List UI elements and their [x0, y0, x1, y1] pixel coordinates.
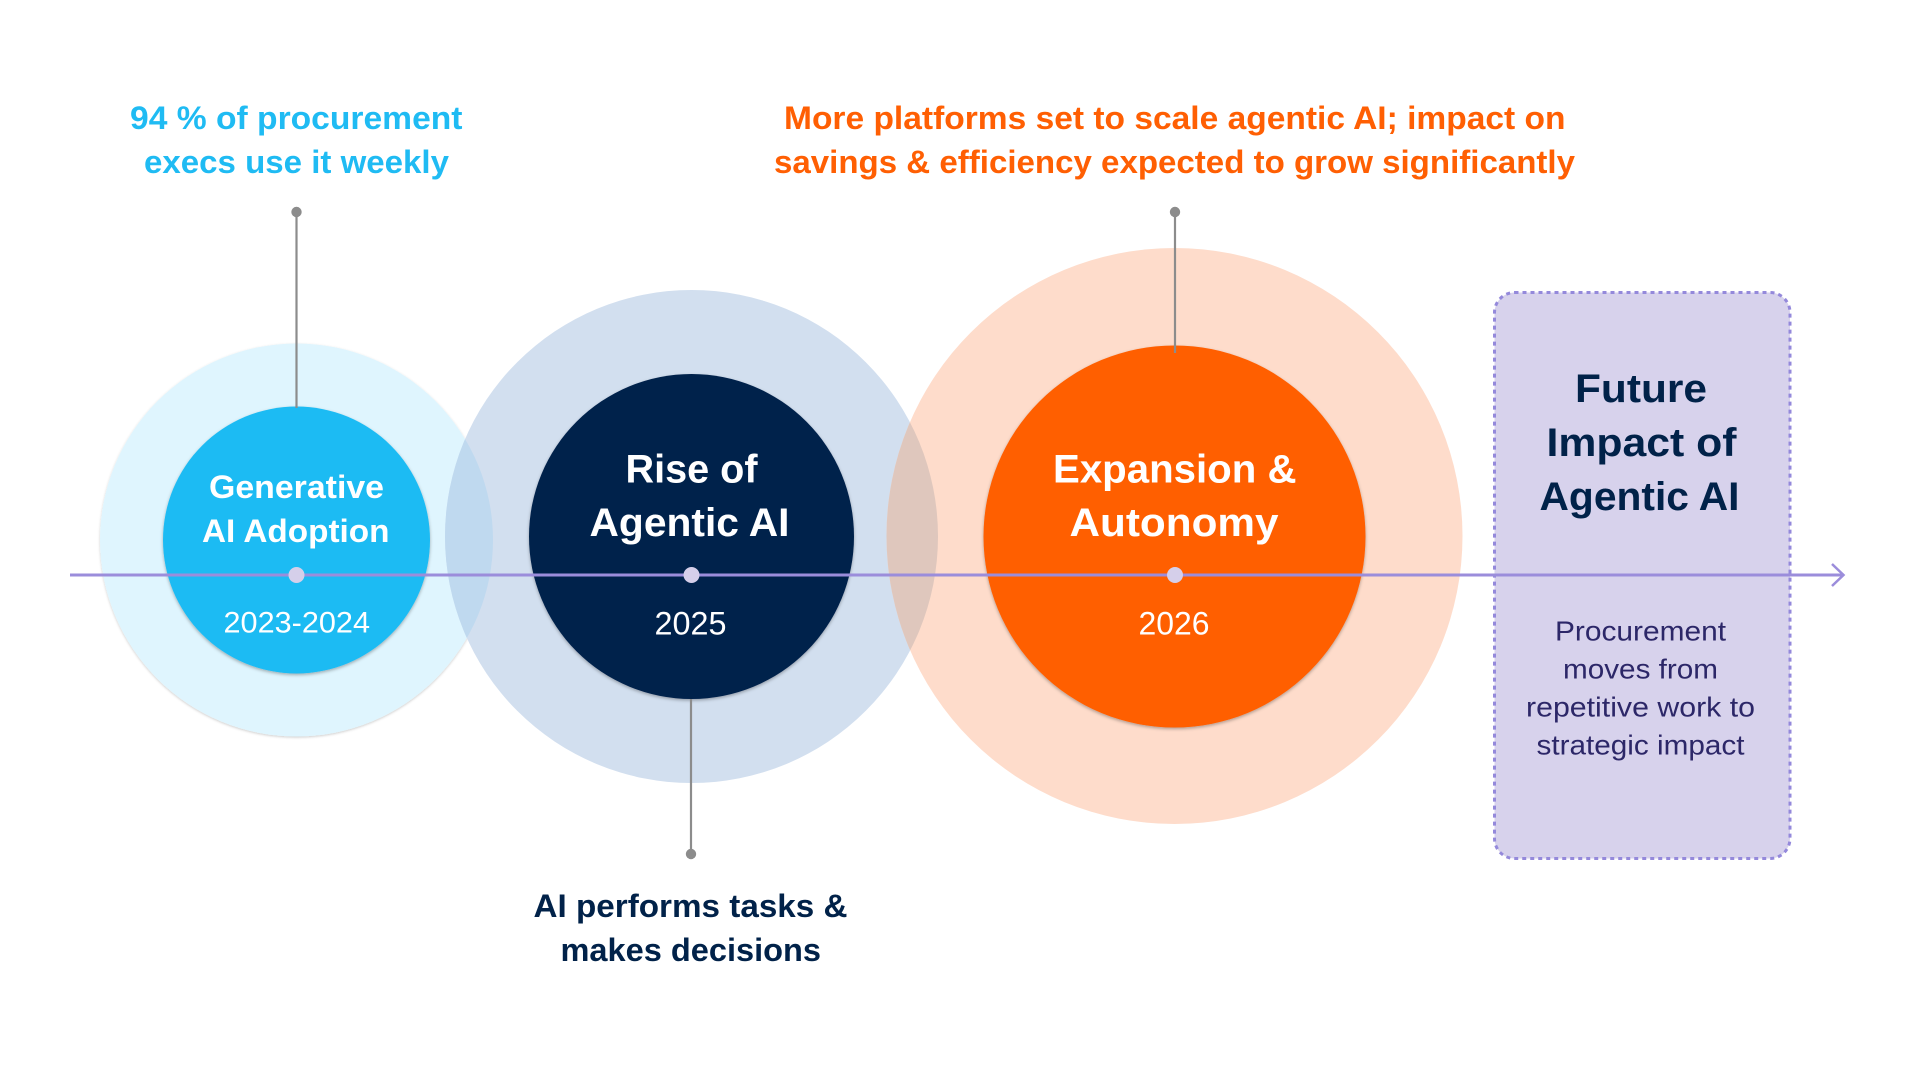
inner circle: rise of agentic AI	[529, 374, 854, 699]
stage label: generative AI adoption	[202, 469, 390, 640]
panel heading: Future	[1575, 367, 1707, 411]
stage label: rise of agentic AI: Agentic AI	[590, 501, 790, 545]
callout: platforms scaling agentic AI: savings & efficiency expected to grow significantly	[774, 144, 1575, 180]
overlap: second and third outer circles	[886, 422, 938, 650]
overlap: first and second outer circles	[445, 440, 493, 638]
connector: agentic AI callout	[686, 699, 696, 859]
callout: AI performs tasks: makes decisions	[560, 932, 821, 968]
timeline arrow	[70, 564, 1844, 586]
stage label: expansion and autonomy: Autonomy	[1070, 501, 1279, 545]
callout: weekly use by procurement execs: 94 % of procurement	[130, 100, 463, 136]
panel: future impact of agentic AI	[1494, 292, 1790, 858]
timeline infographic	[70, 106, 1846, 962]
stage label: rise of agentic AI	[590, 448, 790, 642]
callout: weekly use by procurement execs: execs use it weekly	[144, 144, 449, 180]
stage label: generative AI adoption: 2023-2024	[224, 606, 370, 640]
panel body text: Procurement	[1555, 616, 1726, 646]
callout: weekly use by procurement execs	[130, 100, 463, 180]
stage label: expansion and autonomy: Expansion &	[1053, 448, 1296, 492]
outer circle: expansion and autonomy	[886, 248, 1462, 824]
panel body text: strategic impact	[1536, 730, 1745, 760]
connector: generative AI callout	[291, 207, 302, 408]
callout: AI performs tasks	[534, 888, 848, 968]
timeline marker 2023-2024	[288, 567, 304, 583]
stage label: expansion and autonomy	[1053, 448, 1296, 642]
stage label: expansion and autonomy: 2026	[1138, 606, 1210, 642]
stage label: generative AI adoption: AI Adoption	[202, 513, 390, 549]
inner circle: generative AI adoption	[163, 406, 430, 674]
inner circle: expansion and autonomy	[984, 346, 1366, 728]
panel body text	[1526, 616, 1755, 760]
outer circle: generative AI adoption	[100, 344, 493, 736]
stage label: generative AI adoption: Generative	[209, 469, 384, 505]
panel heading: Impact of	[1546, 421, 1737, 465]
stage label: rise of agentic AI: Rise of	[626, 448, 758, 492]
panel heading: Agentic AI	[1540, 475, 1740, 519]
callout: platforms scaling agentic AI: More platforms set to scale agentic AI; impact on	[784, 100, 1566, 136]
panel body text: repetitive work to	[1526, 692, 1755, 722]
connector: expansion callout	[1170, 207, 1180, 353]
panel body text: moves from	[1563, 654, 1718, 684]
timeline marker 2025	[684, 567, 700, 583]
panel heading	[1540, 367, 1740, 519]
timeline marker 2026	[1167, 567, 1183, 583]
callout: platforms scaling agentic AI	[774, 100, 1575, 180]
outer circle: rise of agentic AI	[445, 290, 938, 783]
stage label: rise of agentic AI: 2025	[654, 606, 726, 642]
callout: AI performs tasks: AI performs tasks &	[534, 888, 848, 924]
